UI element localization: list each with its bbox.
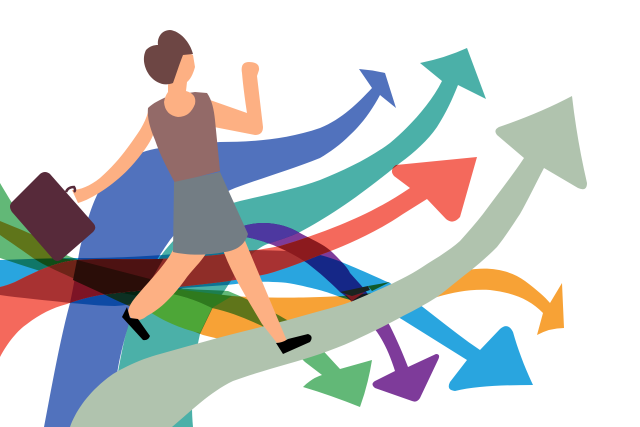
arrow: sage main arrow <box>70 96 587 427</box>
arrow: red with overlap tints <box>0 157 477 357</box>
neck and head <box>164 50 195 117</box>
skirt <box>173 172 248 255</box>
hair <box>144 30 193 84</box>
arrow: blue <box>44 69 396 427</box>
arrow: orange <box>0 221 564 343</box>
leg: front <box>223 236 287 343</box>
patch: small dark overlaps by the sage arrow <box>340 282 390 301</box>
shoe: front <box>276 334 312 354</box>
arrow: teal <box>118 48 486 427</box>
shoe: back <box>122 307 150 340</box>
handle of briefcase <box>66 187 75 192</box>
arm: raised <box>210 62 263 135</box>
arrow: cyan <box>0 250 533 391</box>
arrow: green <box>0 183 372 407</box>
arrow: purple <box>235 223 439 402</box>
patch: bright green overlap <box>150 294 212 333</box>
patch: dark green overlap <box>173 289 232 308</box>
briefcase <box>10 172 95 261</box>
patch: purple over teal <box>244 223 299 244</box>
arm: with briefcase <box>72 112 154 203</box>
sleeveless top <box>148 92 220 183</box>
figure: woman <box>10 30 312 354</box>
leg: back <box>128 250 207 320</box>
